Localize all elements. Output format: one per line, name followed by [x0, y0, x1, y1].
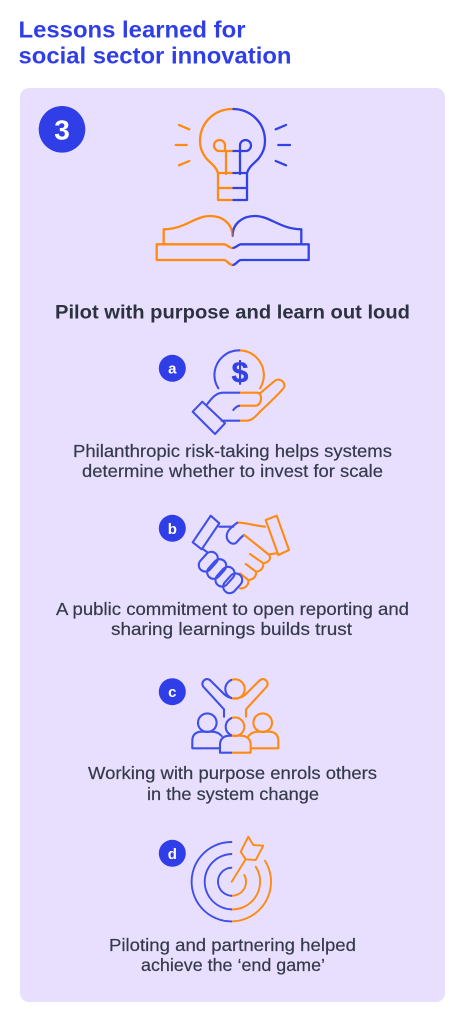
heading: Pilot with purpose and learn out loud — [55, 302, 410, 324]
item a — [73, 350, 392, 481]
badge c — [159, 678, 186, 705]
text a: determine whether to invest for scale — [82, 461, 383, 481]
text c: in the system change — [147, 784, 319, 804]
text b: A public commitment to open reporting and — [56, 599, 409, 619]
text c: Working with purpose enrols others — [88, 763, 377, 783]
badge d: d — [168, 846, 177, 863]
badge b — [159, 515, 186, 542]
text b — [56, 599, 409, 639]
icon: group of people — [192, 679, 278, 753]
text d: Piloting and partnering helped — [109, 935, 356, 955]
text a: Philanthropic risk-taking helps systems — [73, 441, 392, 461]
text d: achieve the ‘end game’ — [141, 955, 325, 975]
icon: hand holding coin — [193, 350, 284, 434]
title: Lessons learned for — [18, 16, 246, 42]
number badge 3: 3 — [54, 114, 70, 146]
text c — [88, 763, 377, 804]
title: social sector innovation — [18, 42, 292, 68]
badge a: a — [168, 360, 177, 378]
number badge 3 — [39, 106, 85, 153]
item b — [56, 515, 409, 639]
text a — [73, 441, 392, 481]
text b: sharing learnings builds trust — [111, 619, 352, 639]
badge a — [159, 355, 186, 382]
text d — [109, 935, 356, 975]
item c — [88, 678, 377, 804]
title — [18, 16, 292, 68]
item d — [109, 837, 356, 975]
icon: light bulb and open book — [157, 109, 309, 265]
icon: target with dart — [192, 837, 271, 921]
icon: hand holding coin: $ — [232, 356, 249, 390]
icon: handshake — [193, 516, 289, 596]
badge b: b — [168, 521, 177, 538]
badge d — [159, 840, 186, 867]
badge c: c — [168, 684, 176, 701]
